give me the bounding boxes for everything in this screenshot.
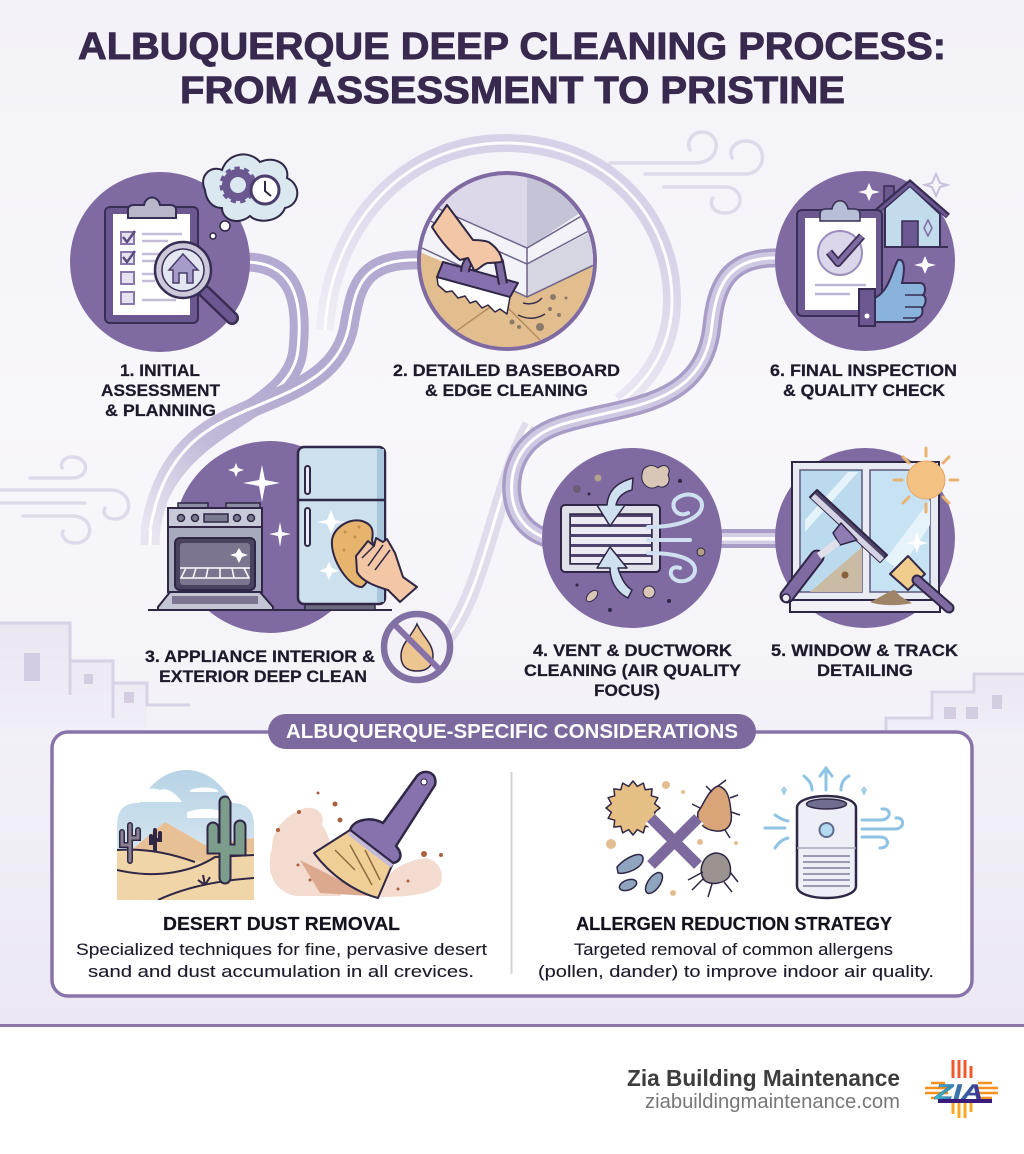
- footer band: [0, 1024, 1024, 1154]
- label: step 3: 3. APPLIANCE INTERIOR &: [145, 647, 375, 666]
- panel heading pill: [268, 714, 756, 749]
- label: step 4: [524, 641, 742, 700]
- step 1: initial assessment: [70, 154, 297, 420]
- background skyline left: [0, 623, 190, 735]
- icon: squeegee: [782, 490, 887, 602]
- text: allergen reduction strategy: (pollen, dander) to improve indoor air quality.: [538, 962, 934, 981]
- text: allergen reduction strategy: ALLERGEN REDUCTION STRATEGY: [576, 914, 892, 934]
- connector: step 1 to step 3: [150, 262, 299, 545]
- title: FROM ASSESSMENT TO PRISTINE: [180, 70, 845, 112]
- large faint looping pipe: [325, 143, 672, 640]
- logo: Zia symbol: [925, 1060, 998, 1118]
- panel heading pill: ALBUQUERQUE-SPECIFIC CONSIDERATIONS: [286, 721, 738, 743]
- label: step 4: 4. VENT & DUCTWORK: [533, 641, 733, 660]
- label: step 5: DETAILING: [817, 661, 913, 680]
- label: step 3: [145, 647, 375, 686]
- step 3: appliance clean: [145, 441, 450, 686]
- label: step 1: ASSESSMENT: [101, 381, 221, 400]
- icon: refrigerator: [298, 447, 385, 610]
- icon: desert scene: [117, 770, 254, 900]
- panel: Albuquerque-specific considerations: [52, 714, 972, 996]
- icon: thought cloud with gear and clock: [203, 154, 297, 239]
- icon: house: [876, 183, 948, 247]
- icon: air swirls: [648, 495, 702, 581]
- icon: airflow arrows: [597, 478, 633, 598]
- icon: sun: [894, 448, 958, 512]
- icon: clipboard: [105, 198, 198, 323]
- icon: dust particles: [573, 466, 705, 612]
- label: step 1: 1. INITIAL: [120, 361, 200, 380]
- label: step 5: [771, 641, 959, 680]
- icon: scrub brush and hand: [432, 205, 518, 314]
- background skyline right: [886, 674, 1024, 735]
- footer brand text: ziabuildingmaintenance.com: [645, 1091, 900, 1113]
- label: step 4: CLEANING (AIR QUALITY: [524, 661, 742, 680]
- label: step 2: & EDGE CLEANING: [425, 381, 588, 400]
- label: step 6: & QUALITY CHECK: [783, 381, 946, 400]
- icon: vent grille: [561, 505, 660, 572]
- text: desert dust removal: Specialized techniques for fine, pervasive desert: [76, 940, 487, 959]
- icon: paint brush: [890, 556, 949, 608]
- step 6: final inspection: [770, 171, 957, 400]
- icon: crossed allergens: [606, 780, 740, 897]
- icon: clipboard with check: [797, 201, 882, 316]
- label: step 6: 6. FINAL INSPECTION: [770, 361, 957, 380]
- icon: no drip: [384, 614, 450, 680]
- icon: air purifier: [765, 768, 903, 898]
- connector: step 4 to step 5: [720, 529, 778, 548]
- wind swirl top right: [610, 132, 762, 213]
- icon: sparkles: [858, 174, 947, 274]
- icon: magnifying glass with house: [155, 242, 232, 318]
- logo: Zia symbol: ZIA: [934, 1081, 983, 1104]
- text: allergen reduction strategy: [538, 914, 934, 981]
- connector: step 2 to step 3: [150, 260, 420, 530]
- title: ALBUQUERQUE DEEP CLEANING PROCESS:: [78, 26, 946, 68]
- label: step 2: 2. DETAILED BASEBOARD: [393, 361, 620, 380]
- text: allergen reduction strategy: Targeted removal of common allergens: [574, 940, 893, 959]
- label: step 1: [101, 361, 221, 420]
- footer brand text: Zia Building Maintenance: [627, 1065, 900, 1091]
- label: step 1: & PLANNING: [105, 401, 216, 420]
- icon: sparkle: [906, 532, 928, 553]
- step 2: baseboard cleaning: [393, 170, 620, 400]
- connector: step 4 to step 6: [512, 258, 780, 538]
- footer brand text: [627, 1065, 900, 1113]
- icon: thumbs up: [859, 260, 926, 326]
- label: step 4: FOCUS): [594, 681, 660, 700]
- label: step 6: [770, 361, 957, 400]
- step 5: window detailing: [771, 448, 959, 680]
- label: step 5: 5. WINDOW & TRACK: [771, 641, 959, 660]
- icon: broom sweeping dust: [270, 772, 443, 898]
- label: step 3: EXTERIOR DEEP CLEAN: [159, 667, 367, 686]
- text: desert dust removal: sand and dust accumulation in all crevices.: [88, 962, 474, 981]
- icon: sponge and hand: [332, 520, 417, 602]
- icon: sparkles: [228, 463, 291, 547]
- label: step 2: [393, 361, 620, 400]
- title: [78, 26, 946, 112]
- wind swirl left: [0, 457, 129, 543]
- text: desert dust removal: DESERT DUST REMOVAL: [163, 914, 400, 934]
- icon: oven: [148, 503, 392, 610]
- step 4: vent cleaning: [524, 448, 742, 700]
- icon: window: [790, 462, 940, 612]
- icon: baseboard scene: [421, 175, 593, 347]
- text: desert dust removal: [76, 914, 487, 981]
